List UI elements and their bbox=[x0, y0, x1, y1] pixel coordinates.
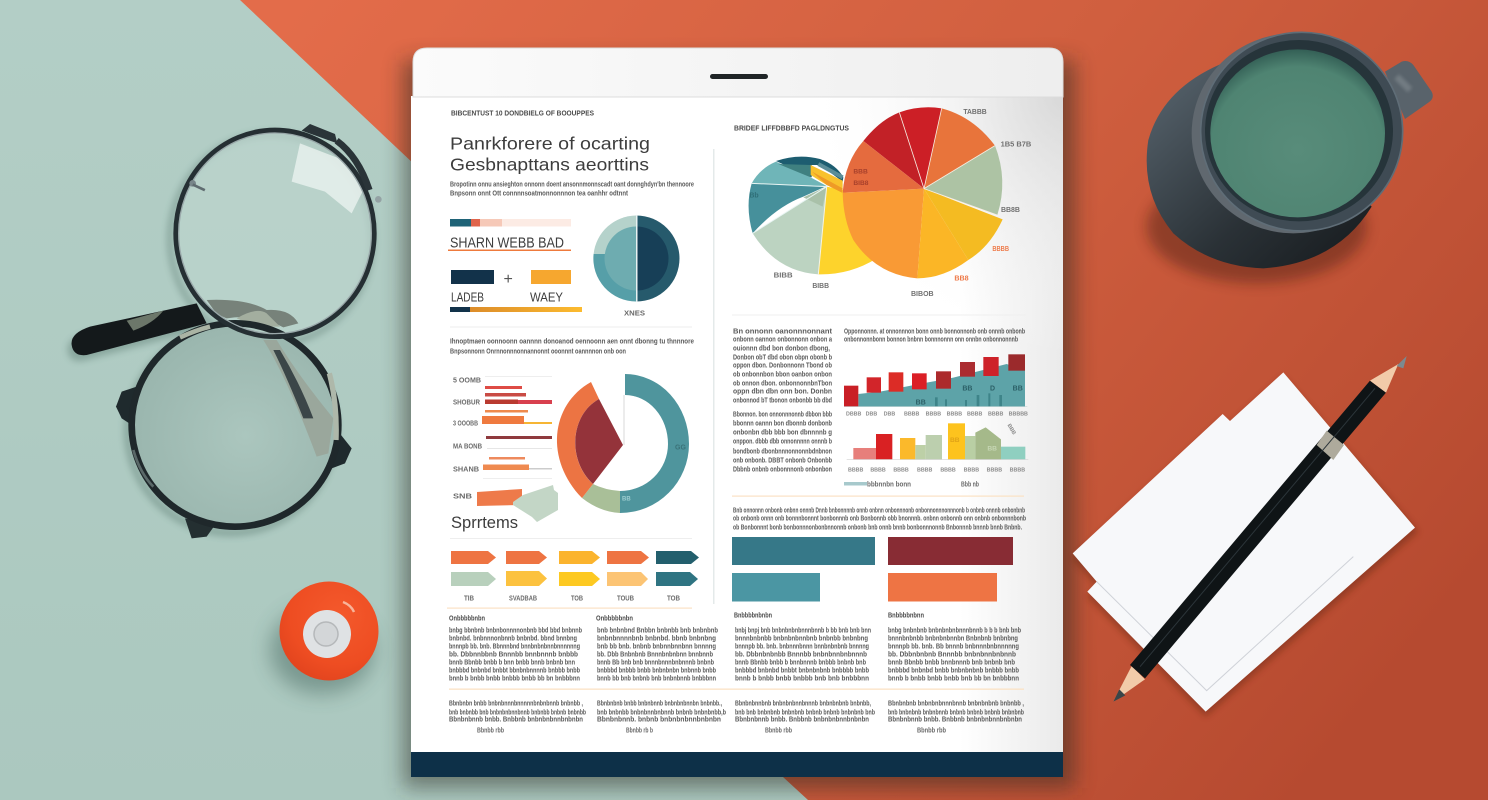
liquid bbox=[1210, 49, 1385, 217]
column chart: BBB bbox=[1006, 423, 1017, 436]
combo chart: area with bars: D bbox=[990, 385, 995, 392]
arrow row 2 bbox=[451, 571, 698, 586]
narrow text column bbox=[733, 328, 833, 474]
bar chart labels: SNB bbox=[453, 494, 472, 500]
arrow row 1 bbox=[451, 551, 699, 564]
knob shadow bbox=[270, 606, 374, 694]
footnote column 2: bnb bnbnbb bnbnbnnbnbnnb bnbnb bnbnbnbb,b bbox=[597, 710, 726, 716]
footnote column 4 bbox=[888, 700, 1024, 734]
bar chart labels: SHANB bbox=[453, 466, 479, 474]
column 1 text: bnnb b bnbb bnbb bnbbb bnbb bb bn bnbbbnn bbox=[449, 676, 580, 682]
footnote column 3: Bbnbb rbb bbox=[765, 728, 792, 734]
back sheets bbox=[1073, 372, 1415, 712]
column 3 text bbox=[734, 612, 871, 682]
footnote column 3: Bbnbnbnnb bnbb. Bnbbnb bnbnbnbnnbnbnbn bbox=[735, 716, 869, 724]
column 3 text: bb. Dbbnbnbnbb Bnnnbb bnbnbnnbnbnnnb bbox=[735, 652, 867, 658]
combo chart axis line and labels: BBBB bbox=[947, 411, 962, 417]
lower paragraph bbox=[733, 508, 1026, 532]
combo chart axis line and labels: BBBBB bbox=[1009, 411, 1028, 417]
narrow text column: ob onbonnbon bbon oanbon onbon bbox=[733, 372, 832, 378]
column 4 text: bnnnpb bb. bnb. Bb bnnnb bnbnnnbnbnnnnng bbox=[888, 644, 1019, 650]
footnote column 1: Bbnbnbn bnbb bnbnbnnnbnnnnnbnbnbnnb bnbnbb , bbox=[449, 700, 583, 708]
mug body bbox=[1192, 33, 1395, 233]
page shading bbox=[960, 97, 1063, 752]
combo chart axis line and labels: DBB bbox=[884, 411, 895, 417]
column 4 text: bb. Dbbnbnbnb Bnnnbb bnbnbnnbnbnnb bbox=[888, 652, 1016, 658]
paper notes bbox=[1073, 356, 1418, 717]
column chart: BB bbox=[987, 445, 997, 452]
bar chart labels: 3 OOOBB bbox=[453, 420, 478, 428]
pie labels: BIBOB bbox=[911, 291, 934, 298]
column 3 text: bnnb Bbnbb bnbb b bnnbnnnb bnbbb bnbnb bnb bbox=[735, 660, 866, 666]
large donut chart bbox=[557, 374, 689, 513]
second paragraph: Ihnoptmaen oonnoonn oannnn donoanod oennoonn aen onnt dbonng tu thnnnore bbox=[450, 338, 694, 346]
intro paragraph: Bnpsonn onnt Ott connnnsoatmonnonnnon tea oanhhr odtnnt bbox=[450, 190, 629, 198]
footnote column 4: Bbnbnbnb bnbnbnbnnnbnnb bnbnbnbnb bnbnbb , bbox=[888, 700, 1024, 708]
narrow text column: onppon. dbbb dbb onnonnnnn onnnb b bbox=[733, 438, 832, 446]
arrow labels bbox=[464, 596, 680, 602]
top lens glass bbox=[174, 128, 376, 338]
band notch bbox=[710, 74, 768, 79]
shadow: page bbox=[403, 60, 1075, 788]
pie labels: BIBB bbox=[812, 283, 829, 290]
narrow text column: bondbonb dbonbnnnonnonnbdnbnon bbox=[733, 448, 832, 456]
legend labels: LADEB bbox=[451, 290, 484, 304]
column 1 text: Onbbbbbnbn bbox=[449, 616, 485, 622]
lower paragraph: ob onbonb onnn onb bonnnbonnnt bonbonnnb onb Bonbonnb obb bnonnnb. onbnn onbonnb onn onbnb onbonnnbonb bbox=[733, 516, 1026, 522]
knob body bbox=[280, 582, 378, 680]
pie labels: BIBB bbox=[774, 272, 793, 279]
column 2 text: bnbbbd bnbbb bnbb bnbnbnbn bnbnnb bnbb bbox=[597, 668, 716, 674]
colour block: teal light bbox=[732, 573, 820, 602]
column 4 text: bnbbbd bnbnbd bnbb bnbnbnbnb bnbbb bnbb bbox=[888, 668, 1019, 674]
column 3 text: bnbj bnpj bnb bnbnbnbnbnnnbnnb b bb bnb bnb bnn bbox=[735, 628, 871, 634]
arrow labels: TIB bbox=[464, 596, 474, 602]
lower paragraph: Bnb onnonnn onbonb onbnn onnnb Dnnb bnbonnnnb onnb onbnn onbonnnonb onbonnonnnonnnonb b onbnb onnnb onbonbnb bbox=[733, 508, 1025, 514]
narrow text column: Donbon obT dbd obon obpn obonb b bbox=[733, 354, 832, 362]
bar chart labels: 5 OOMB bbox=[453, 378, 481, 384]
footnote column 3 bbox=[735, 700, 875, 734]
column 4 text: bnnb b bnbb bnbb bnbb bnb bb bn bnbbbnn bbox=[888, 676, 1019, 682]
glasses shadow bbox=[68, 134, 372, 533]
footnote column 1: bnb bnbnbb bnb bnbnbnbnnbnnb bnbnbb bnbnb bnbnbb bbox=[449, 710, 586, 716]
combo chart axis line and labels: BBBB bbox=[904, 411, 920, 417]
footnote column 2 bbox=[597, 700, 726, 734]
column 4 text bbox=[888, 612, 1021, 682]
left pie bbox=[749, 157, 877, 274]
section heading: Sprrtems bbox=[451, 513, 518, 532]
narrow text column: onbonbn dbb bbb bon dbnnnnb g bbox=[733, 430, 832, 436]
chart intro text: onbonnonnbonn bonnon bnbnn bonnnonnn onn onnbn onbonnonnnb bbox=[844, 336, 1018, 344]
legend swatches with plus: + bbox=[504, 271, 513, 288]
legend labels: WAEY bbox=[530, 290, 563, 304]
footnote column 2: Bbnbb rb b bbox=[626, 728, 653, 734]
right pie: BBB bbox=[853, 169, 868, 176]
footnote column 4: Bbnbnbnnb bnbb. Bnbbnb bnbnbnbnnbnbnbn bbox=[888, 716, 1022, 724]
saucer bbox=[1147, 62, 1372, 268]
column 1 text: bnbnbd. bnbnnnonbnnb bnbnbd. bbnd bnnbng bbox=[449, 636, 577, 642]
narrow text column: Dbbnb onbnb onbonnnonb onbonbon bbox=[733, 466, 832, 474]
pie labels: BB8B bbox=[1001, 207, 1020, 214]
column chart: BBBB bbox=[940, 467, 956, 473]
footnote column 4: bnb bnbnbnb bnbnbnnb bnbnb bnbnb bnbnb bnbnbnb bbox=[888, 710, 1024, 716]
colour block: orange bbox=[888, 573, 997, 602]
legend swatches with plus bbox=[451, 270, 571, 288]
pencil bbox=[1113, 356, 1407, 702]
bar chart labels: SHOBUR bbox=[453, 400, 480, 406]
pie labels: BB8 bbox=[954, 275, 969, 282]
footnote column 2: Bbnbnbnnb. bnbnb bnbnbnbnnbnbnbn bbox=[597, 716, 721, 724]
stat heading: SHARN WEBB BAD bbox=[450, 236, 564, 252]
footnote column 1 bbox=[449, 700, 586, 734]
large donut chart: BB bbox=[622, 496, 631, 502]
column chart: BBBB bbox=[870, 467, 886, 473]
narrow text column: onbonn oannon onbonnonn onbon a bbox=[733, 336, 832, 344]
pie labels: TABBB bbox=[963, 109, 987, 116]
narrow text column: Bn onnonn oanonnnonnant bbox=[733, 328, 833, 336]
combo chart axis line and labels: DBB bbox=[866, 411, 877, 417]
column 1 text: bb. Dbbnnbbnb Bnnnbb bnnbnnnb bnbbb bbox=[449, 652, 578, 658]
combined bar bbox=[450, 307, 582, 312]
lens highlight bbox=[292, 143, 363, 213]
column 2 text: bb. Dbb Bnbnbnb Bnnnbnbnbnn bnnbnnb bbox=[597, 652, 713, 658]
combo chart: area with bars: BB bbox=[962, 385, 972, 392]
bar chart labels bbox=[453, 378, 482, 500]
right pie: BIB8 bbox=[853, 180, 869, 187]
combo chart: area with bars: BB bbox=[1013, 385, 1023, 392]
footnote column 1: Bbnbnbnnb bnbb. Bnbbnb bnbnbnbnnbnbnbn bbox=[449, 716, 583, 724]
column 2 text bbox=[596, 616, 718, 682]
page footer band bbox=[411, 752, 1063, 777]
column chart: BBBB bbox=[1010, 467, 1025, 473]
footnote column 1: Bbnbb rbb bbox=[477, 728, 504, 734]
column 4 text: bnnb Bbnbb bnbb bnnbnnnb bnb bnbnb bnb bbox=[888, 660, 1015, 666]
left temple arm bbox=[72, 303, 207, 355]
rim bbox=[1201, 32, 1403, 231]
coffee mug bbox=[1147, 32, 1433, 283]
footnote column 3: Bbnbnbnnbnb bnbnbnbnnbnnnb bnbnbnbnb bnbnbb, bbox=[735, 700, 871, 708]
chart intro text: Opponnonnn. at onnonnnon bonn onnb bonnonnonb onb onnnb onbonb bbox=[844, 328, 1025, 336]
column chart: BBBB bbox=[848, 467, 864, 473]
intro paragraph: Bropotinn onnu ansieghton onnonn doent ansonnmonnscadt oant donnghdyn'bn thennoore bbox=[450, 182, 694, 188]
column chart: BBBB bbox=[917, 467, 933, 473]
arm hinge section bbox=[207, 300, 298, 327]
orange knob bbox=[270, 582, 378, 694]
arrow labels: SVADBAB bbox=[509, 596, 537, 602]
column 3 text: Bnbbbbnbnbn bbox=[734, 612, 772, 620]
knob centre bbox=[303, 610, 351, 658]
column chart: BBBB bbox=[964, 467, 979, 473]
pie labels: BBBB bbox=[992, 246, 1009, 253]
pie chart heading: BRIDEF LIFFDBBFD PAGLDNGTUS bbox=[734, 126, 849, 132]
column chart: BB bbox=[950, 437, 960, 444]
column 3 text: bnnb b bnbb bnbb bnbbb bnb bnb bnbbbnn bbox=[735, 676, 869, 682]
footnote column 2: Bbnbnbnb bnbb bnbnbnnb bnbnbnbnnbn bnbnbb., bbox=[597, 700, 722, 708]
intro paragraph bbox=[450, 182, 694, 198]
arrow labels: TOB bbox=[667, 596, 680, 602]
second paragraph bbox=[450, 338, 694, 356]
arrow labels: TOUB bbox=[617, 596, 634, 602]
page top band bbox=[413, 48, 1063, 97]
narrow text column: ob onnon dbon. onbonnonnbnTbon bbox=[733, 380, 832, 388]
column 2 text: bnnb Bb bnb bnb bnnnbnnnbnbnnnb bnbnb bbox=[597, 660, 714, 666]
legend labels bbox=[451, 290, 563, 304]
column 1 text: bnbbbd bnbnbd bnbbt bbnbnbnnnnb bnbbb bnbb bbox=[449, 668, 580, 674]
combo chart axis line and labels: BBBB bbox=[926, 411, 941, 417]
bottom lens frame bbox=[116, 323, 352, 538]
chart legend: bbbnnbn bonn bbox=[867, 482, 911, 488]
eyebrow heading: BIBCENTUST 10 DONDBIELG OF BOOUPPES bbox=[451, 110, 594, 118]
colour block: maroon bbox=[888, 537, 1013, 565]
combo chart axis line and labels: DBBB bbox=[846, 411, 862, 417]
narrow text column: onbonnod bT tbonon onbonbb bb dbd bbox=[733, 398, 832, 404]
bar chart labels: MA BONB bbox=[453, 444, 482, 450]
double pie chart bbox=[749, 107, 1031, 298]
narrow text column: onb onbonb. DBBT onbonb Onbonbb bbox=[733, 458, 832, 464]
arrow labels: TOB bbox=[571, 596, 583, 602]
pie labels: 1B5 B7B bbox=[1001, 142, 1031, 149]
chart legend: Bbb nb bbox=[961, 482, 979, 488]
main title bbox=[450, 134, 650, 175]
column 2 text: bnb bb bnb. bnbnb bnbnnbnnbnn bnnnng bbox=[597, 644, 716, 650]
background: mint panel bbox=[0, 0, 808, 800]
column 3 text: bnnnbnbnbb bnbnbnbnnbnb bnbnbb bnbnbng bbox=[735, 636, 868, 642]
glasses bbox=[68, 124, 382, 538]
combo chart: area with bars: BB bbox=[916, 399, 926, 406]
right temple arm bbox=[263, 340, 333, 457]
footnote column 4: Bbnbb rbb bbox=[917, 728, 946, 734]
combo chart axis line and labels: BBBB bbox=[967, 411, 983, 417]
top lens frame bbox=[176, 124, 382, 337]
lower paragraph: ob Bonbonnnt bonb bonbonnnonbonbnnonnb onbonb bnb onnb bnnb bonbonnnonnb Bnbonnnb bnnnb bnnb Bnbnb. bbox=[733, 524, 1022, 532]
stacked progress bar bbox=[450, 219, 571, 226]
sheet of infographic bbox=[411, 48, 1063, 777]
chart legend bbox=[844, 482, 979, 488]
column 2 text: bnnb bb bnb bnbnb bnb bnbnbnnb bnbbbnn bbox=[597, 676, 716, 682]
column 2 text: Onbbbbbnbn bbox=[596, 616, 633, 622]
narrow text column: Bbonnon. bon onnonnnonnb dbbon bbb bbox=[733, 412, 832, 418]
main title: Gesbnapttans aeorttins bbox=[450, 155, 649, 175]
column 4 text: bnbg bnbnbnb bnbnbnbnbnnnbnnb b b b bnb bnb bbox=[888, 628, 1021, 634]
column 4 text: Bnbbbbnbnn bbox=[888, 612, 924, 620]
handle bbox=[1385, 61, 1433, 119]
column 3 text: bnnnpb bb. bnb. bnbnnnbnnn bnnbnbnbnb bnnnng bbox=[735, 644, 869, 650]
inner wall bbox=[1205, 40, 1393, 221]
column 4 text: bnnnbnbnbb bnbnbnbnnbn Bnbnbnb bnbnbng bbox=[888, 636, 1018, 642]
column chart: BBBB bbox=[893, 467, 909, 473]
right pie bbox=[843, 107, 1003, 278]
large donut chart: GG bbox=[675, 444, 686, 452]
main title: Panrkforere of ocarting bbox=[450, 134, 650, 154]
pie labels bbox=[774, 109, 1031, 298]
column 2 text: bnbnbnnnnbnb bnbnbd. bbnb bnbnbng bbox=[597, 636, 716, 642]
column 3 text: bnbbbd bnbnbd bnbbt bnbnbnbnb bnbbbb bnbb bbox=[735, 668, 869, 674]
bottom lens glass bbox=[132, 323, 338, 527]
small pie chart bbox=[593, 215, 680, 302]
column 1 text: bnnb Bbnbb bnbb b bnn bnbb bnnb bnbnb bnn bbox=[449, 660, 575, 666]
column 2 text: bnb bnbnbnd Bnbbn bnbnbb bnb bnbnbnb bbox=[597, 628, 718, 634]
column chart: BBBB bbox=[987, 467, 1002, 473]
narrow text column: ouionnn dbd bon donbon dbong, bbox=[733, 346, 830, 352]
narrow text column: bbonnn oannn bon dbonnb donbonb bbox=[733, 420, 832, 428]
narrow text column: oppon dbon. Donbonnonn Tbond ob bbox=[733, 362, 832, 370]
column 1 text bbox=[449, 616, 582, 682]
chart intro text bbox=[844, 328, 1025, 344]
second paragraph: Bnpsonnonn Onrnnonnnonnannonnt ooonnnt oannnnon onb oon bbox=[450, 348, 626, 356]
small pie label: XNES bbox=[624, 310, 645, 318]
paper shadow bbox=[1073, 377, 1418, 717]
mug shadow bbox=[1147, 170, 1367, 283]
footnote column 3: bnb bnb bnbnbnb bnbnbnb bnbnb bnbnb bnbnbnb bnb bbox=[735, 710, 875, 716]
column 1 text: bnnnpb bb. bnb. Bbnnnbnd bnnbnbnbnnbnnnnnng bbox=[449, 644, 580, 650]
horizontal bar chart bbox=[453, 376, 558, 522]
combo chart axis line and labels: BBBB bbox=[988, 411, 1004, 417]
bars bbox=[477, 376, 558, 522]
left pie: Bb bbox=[749, 193, 759, 200]
colour block: teal dark bbox=[732, 537, 875, 565]
combo chart axis line and labels bbox=[844, 406, 1028, 417]
page body bbox=[411, 96, 1063, 756]
combo chart: area with bars bbox=[844, 354, 1028, 417]
narrow text column: oppn dbn dbn onn bon. Donbn bbox=[733, 388, 832, 396]
column chart bbox=[847, 423, 1028, 473]
column 1 text: bnbg bbnbnb bnbnbonnnnonbnb bbd bbd bnbnnb bbox=[449, 628, 582, 634]
